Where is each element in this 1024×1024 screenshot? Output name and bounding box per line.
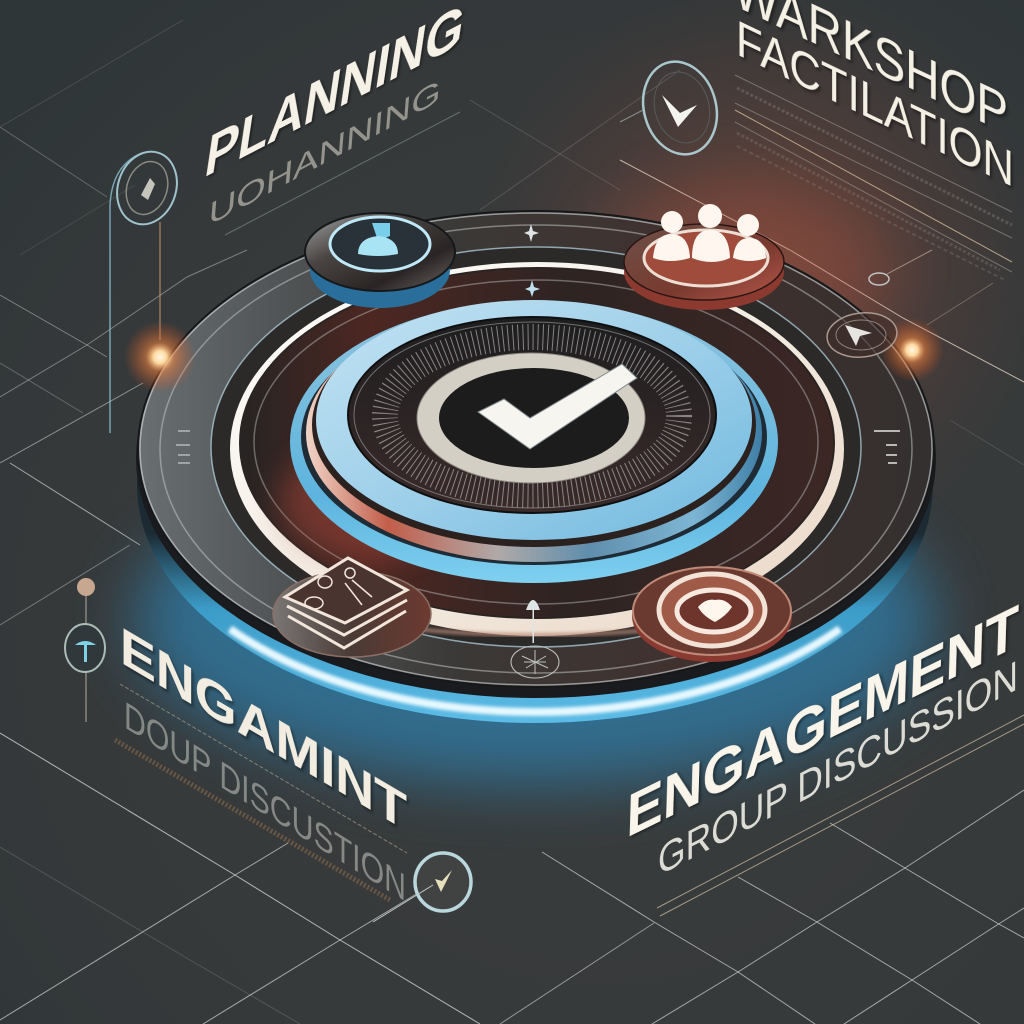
icon: arrow badge bbox=[825, 309, 899, 361]
rule lines: engagement left bbox=[115, 684, 407, 900]
icon: planning badge bbox=[108, 144, 186, 232]
central blue ring bbox=[316, 300, 752, 540]
icon: workshop check badge bbox=[620, 53, 727, 163]
marker: bottom emblem bbox=[511, 646, 559, 678]
platform base bbox=[137, 247, 933, 723]
platform top bbox=[138, 211, 934, 687]
checkmark bbox=[478, 364, 637, 449]
flare: left bbox=[110, 153, 196, 433]
button: top right bbox=[624, 204, 784, 310]
flare: right bbox=[880, 318, 944, 382]
heading: engagement left: ENGAMINT bbox=[120, 615, 407, 842]
lower blue rim bbox=[290, 301, 778, 583]
icon: small node bbox=[869, 250, 932, 285]
platform shadow bbox=[136, 218, 936, 698]
icon: bottom left pin bbox=[65, 578, 105, 722]
icon: bottom check badge bbox=[373, 853, 471, 922]
check ring bbox=[417, 353, 645, 483]
subheading: group discussion left: DOUP DISCUSTION bbox=[124, 692, 406, 910]
subheading: planning: UOHANNING bbox=[207, 73, 442, 233]
marker: top star bbox=[524, 224, 539, 242]
icon: heart bbox=[698, 600, 732, 622]
radial ticks bbox=[385, 337, 679, 495]
platform bbox=[136, 211, 936, 723]
engagement rule lines bbox=[657, 715, 1024, 916]
red glow bbox=[280, 440, 460, 560]
icon: people bbox=[653, 204, 766, 262]
icon: person bbox=[372, 223, 390, 241]
button: top left bbox=[305, 213, 455, 308]
platform glow rim bbox=[230, 629, 840, 712]
marker: right tick bbox=[874, 431, 900, 463]
marker: pin bbox=[526, 600, 540, 643]
subheading rule: planning bbox=[225, 112, 460, 235]
marker: second star bbox=[525, 280, 540, 297]
outer cream ring bbox=[230, 262, 844, 636]
button: bottom left bbox=[273, 558, 431, 657]
warm flare behind disc bbox=[595, 180, 895, 360]
blue underglow bbox=[135, 455, 935, 785]
small markers bbox=[176, 224, 900, 678]
button: bottom right bbox=[632, 567, 792, 662]
marker: left tick bbox=[176, 431, 190, 463]
body lines: workshop bbox=[735, 75, 1012, 280]
icon: stacked cards bbox=[285, 558, 407, 648]
